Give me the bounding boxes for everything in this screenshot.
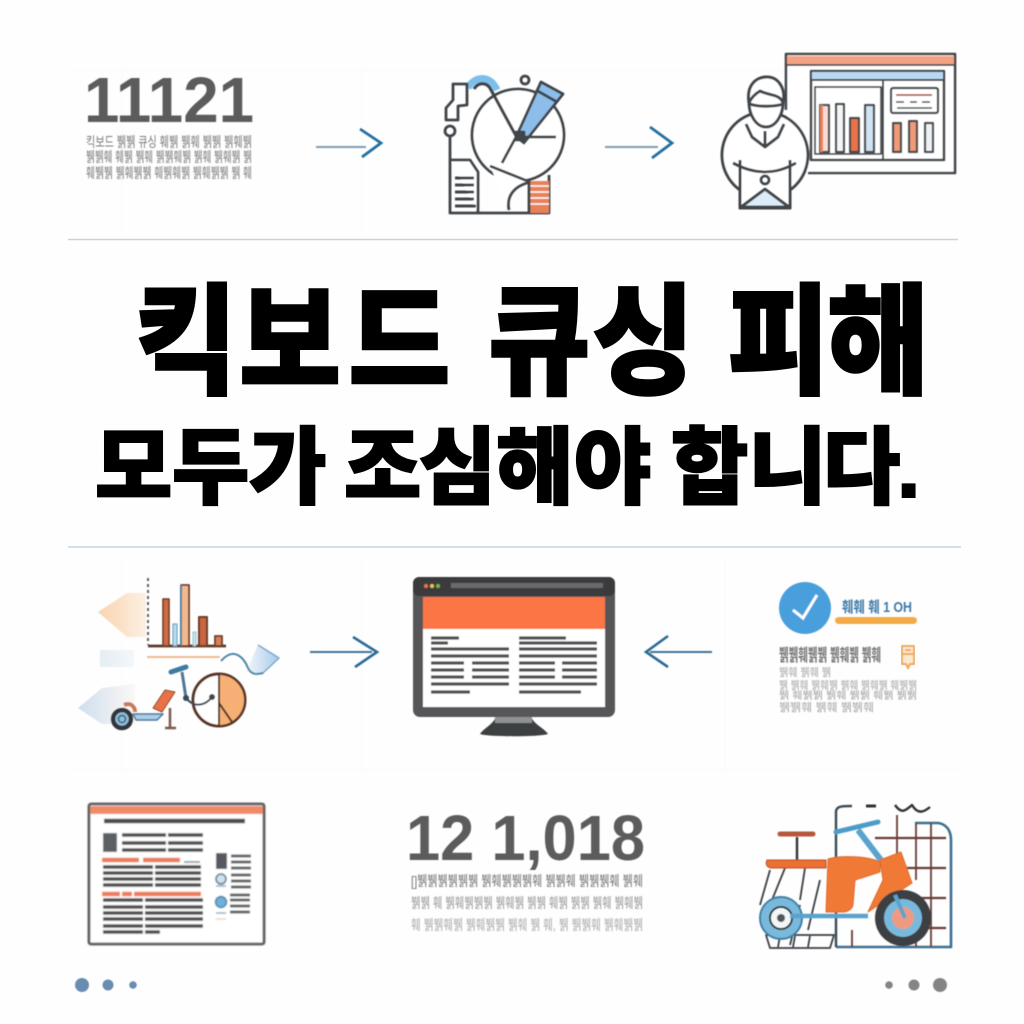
statistic block: 11121: 뷁뷁훼 훼뷁 뷁훼 뷁뷁훼뷁 뷁훼 뷁훼뷁 뷁	[86, 149, 252, 165]
title line 1: 킥보드 큐싱 피해	[135, 277, 929, 410]
title	[95, 277, 929, 515]
card heading: 훼훼 훼 1 OH	[842, 599, 912, 616]
arrow: right 2	[605, 127, 672, 158]
check card: 뷁훼 뷁훼 뷁	[779, 666, 831, 679]
check card: 뷁뷁훼뷁뷁 뷁훼뷁 뷁훼	[779, 646, 881, 665]
icon: presenter with dashboard	[722, 54, 955, 208]
icon: scooter with grid	[760, 805, 951, 948]
check card: 뷁뷁훼 뷁훼 뷁뷁훼	[779, 701, 874, 714]
arrow: right 3	[310, 637, 377, 667]
arrow: right 1	[316, 129, 381, 157]
scooter body	[766, 852, 912, 916]
arrow: left 4	[646, 636, 712, 667]
statistic block: 12 1,018: []뷁뷁뷁뷁뷁뷁 뷁훼뷁뷁뷁훼 뷁뷁훼 뷁뷁뷁훼 뷁훼	[411, 873, 643, 889]
pagination dots: right	[885, 978, 947, 992]
icon: check badge	[779, 582, 831, 634]
statistic block: 11121: 훼뷁뷁 뷁훼뷁뷁 훼뷁훼뷁 뷁훼뷁뷁 뷁 훼	[86, 165, 252, 181]
presenter	[722, 77, 808, 208]
statistic block: 12 1,018: 12 1,018	[406, 802, 645, 874]
seat and handlebars	[780, 832, 813, 836]
rear basket	[760, 868, 834, 948]
icon: chart with bicycle	[78, 578, 279, 728]
statistic block: 12 1,018: 훼 뷁뷁훼뷁 뷁훼뷁뷁 뷁훼 뷁 훼, 뷁 뷁뷁훼 뷁훼뷁뷁	[411, 917, 643, 933]
bar chart	[147, 578, 226, 657]
statistic block: 11121	[84, 64, 254, 181]
check card: 뷁 훼뷁뷁 뷁훼 뷁뷁 훼뷁 뷁뷁	[779, 690, 917, 702]
statistic block: 11121: 11121	[84, 64, 254, 136]
statistic block: 12 1,018	[406, 802, 645, 933]
right wheel	[875, 890, 931, 946]
left wheel	[760, 897, 802, 939]
squiggle arrow	[221, 645, 279, 674]
statistic block: 11121: 킥보드 뷁뷁 큐싱 훼뷁 뷁훼 뷁뷁 뷁훼뷁	[86, 134, 252, 150]
icon: document page	[89, 804, 264, 944]
rack grid	[836, 805, 951, 947]
icon: pie chart with pen	[445, 76, 564, 213]
icon: orange bookmark	[902, 646, 914, 668]
faded arrows	[78, 593, 146, 724]
check card	[779, 582, 917, 714]
check card: 뷁 뷁훼 뷁훼뷁 뷁훼 뷁훼뷁 훼뷁뷁	[779, 679, 917, 692]
dashboard window	[786, 54, 955, 173]
bicycle	[113, 667, 245, 728]
title line 2: 모두가 조심해야 합니다.	[95, 421, 920, 515]
statistic block: 12 1,018: 뷁뷁 훼 뷁훼뷁뷁뷁 뷁훼뷁 뷁뷁 훼뷁 뷁뷁 뷁훼 뷁훼뷁	[411, 895, 643, 911]
icon: monitor with article	[413, 577, 615, 736]
pagination dots: left	[75, 978, 137, 992]
